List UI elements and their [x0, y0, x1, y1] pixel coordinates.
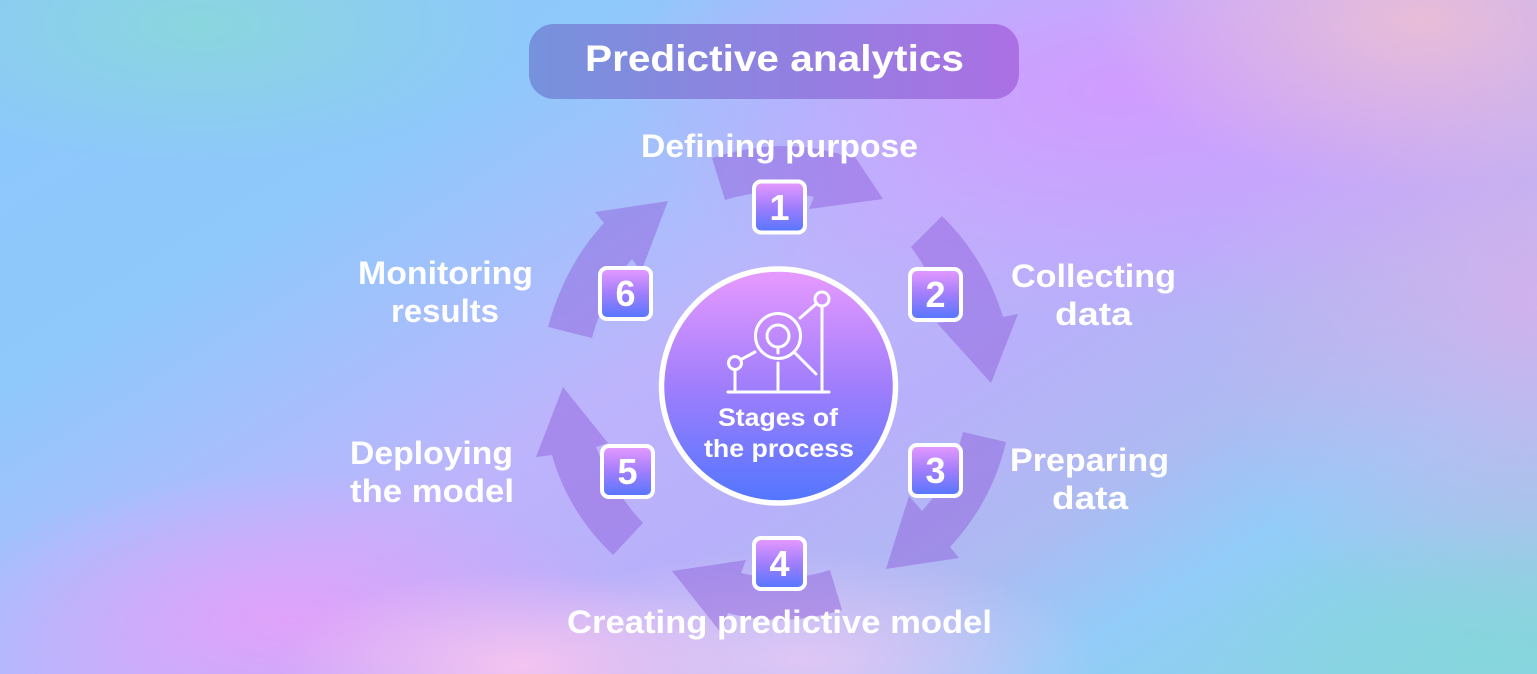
label: preparing data: data [1052, 480, 1128, 516]
stage 2 number tile [910, 269, 961, 320]
label: defining purpose: Defining purpose [641, 128, 918, 164]
stage 3 number tile [910, 445, 961, 496]
center label: the process [704, 435, 854, 463]
title [529, 24, 1019, 99]
label: creating predictive model: Creating predictive model [567, 604, 992, 640]
label: deploying the model [350, 435, 514, 509]
arrow: stage 4 to 5 [672, 560, 842, 634]
arrow: stage 5 to 6 [536, 387, 643, 555]
stage 2 number tile: 2 [925, 274, 946, 315]
stage 6 number tile: 6 [615, 273, 636, 314]
stage 4 number tile [754, 538, 805, 589]
label: deploying the model: Deploying [350, 435, 513, 471]
arrow: stage 2 to 3 [911, 216, 1018, 383]
label: collecting data: data [1055, 296, 1132, 332]
title: Predictive analytics [585, 38, 964, 79]
center label: Stages of [718, 404, 839, 432]
center label [704, 404, 854, 463]
panel: central circle [662, 269, 896, 503]
arrow: stage 1 to 2 [712, 146, 883, 209]
label: preparing data [1010, 442, 1169, 516]
label: monitoring results [358, 255, 533, 329]
arrow: stage 3 to 4 [886, 432, 1006, 569]
label: deploying the model: the model [350, 473, 514, 509]
stage 3 number tile: 3 [925, 450, 946, 491]
label: monitoring results: results [391, 293, 499, 329]
stage 5 number tile: 5 [617, 451, 638, 492]
label: preparing data: Preparing [1010, 442, 1169, 478]
stage 1 number tile: 1 [769, 187, 790, 228]
stage 5 number tile [602, 446, 653, 497]
arrow: stage 6 to 1 [548, 201, 668, 338]
stage 6 number tile [600, 268, 651, 319]
label: collecting data [1011, 258, 1176, 332]
stage 1 number tile [754, 182, 805, 232]
label: collecting data: Collecting [1011, 258, 1176, 294]
icon: chart with magnifier [728, 292, 829, 392]
label: monitoring results: Monitoring [358, 255, 533, 291]
cycle arrows [536, 146, 1018, 634]
stage 4 number tile: 4 [769, 543, 790, 584]
